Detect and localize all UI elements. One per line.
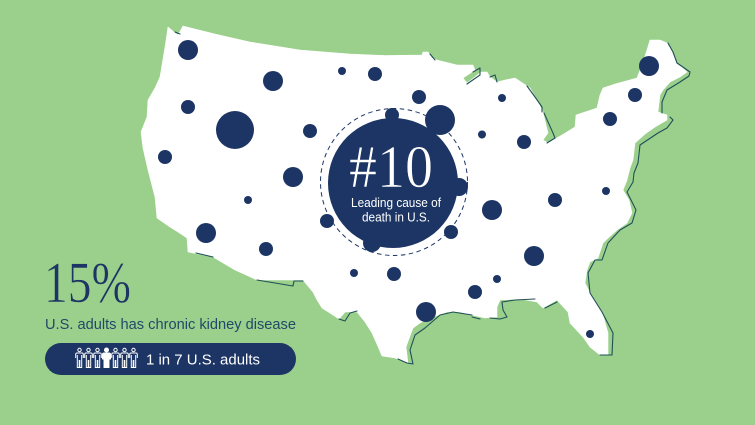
central callout: leading cause of death	[320, 105, 468, 256]
data dots across the states	[158, 40, 659, 338]
statistic: 15%: 15%	[44, 250, 131, 315]
central callout: leading cause of death: death in U.S.	[362, 210, 430, 224]
map of the United States	[141, 26, 690, 364]
pill: 1 in 7 U.S. adults	[45, 343, 296, 375]
rank number: #10	[349, 134, 433, 200]
icon: seven people, one highlighted	[76, 348, 137, 368]
pill label: 1 in 7 U.S. adults	[146, 352, 260, 368]
coastline offset stroke	[175, 32, 690, 364]
callout caption: Leading cause of	[351, 196, 441, 210]
statistic description: U.S. adults has chronic kidney disease	[45, 317, 296, 333]
